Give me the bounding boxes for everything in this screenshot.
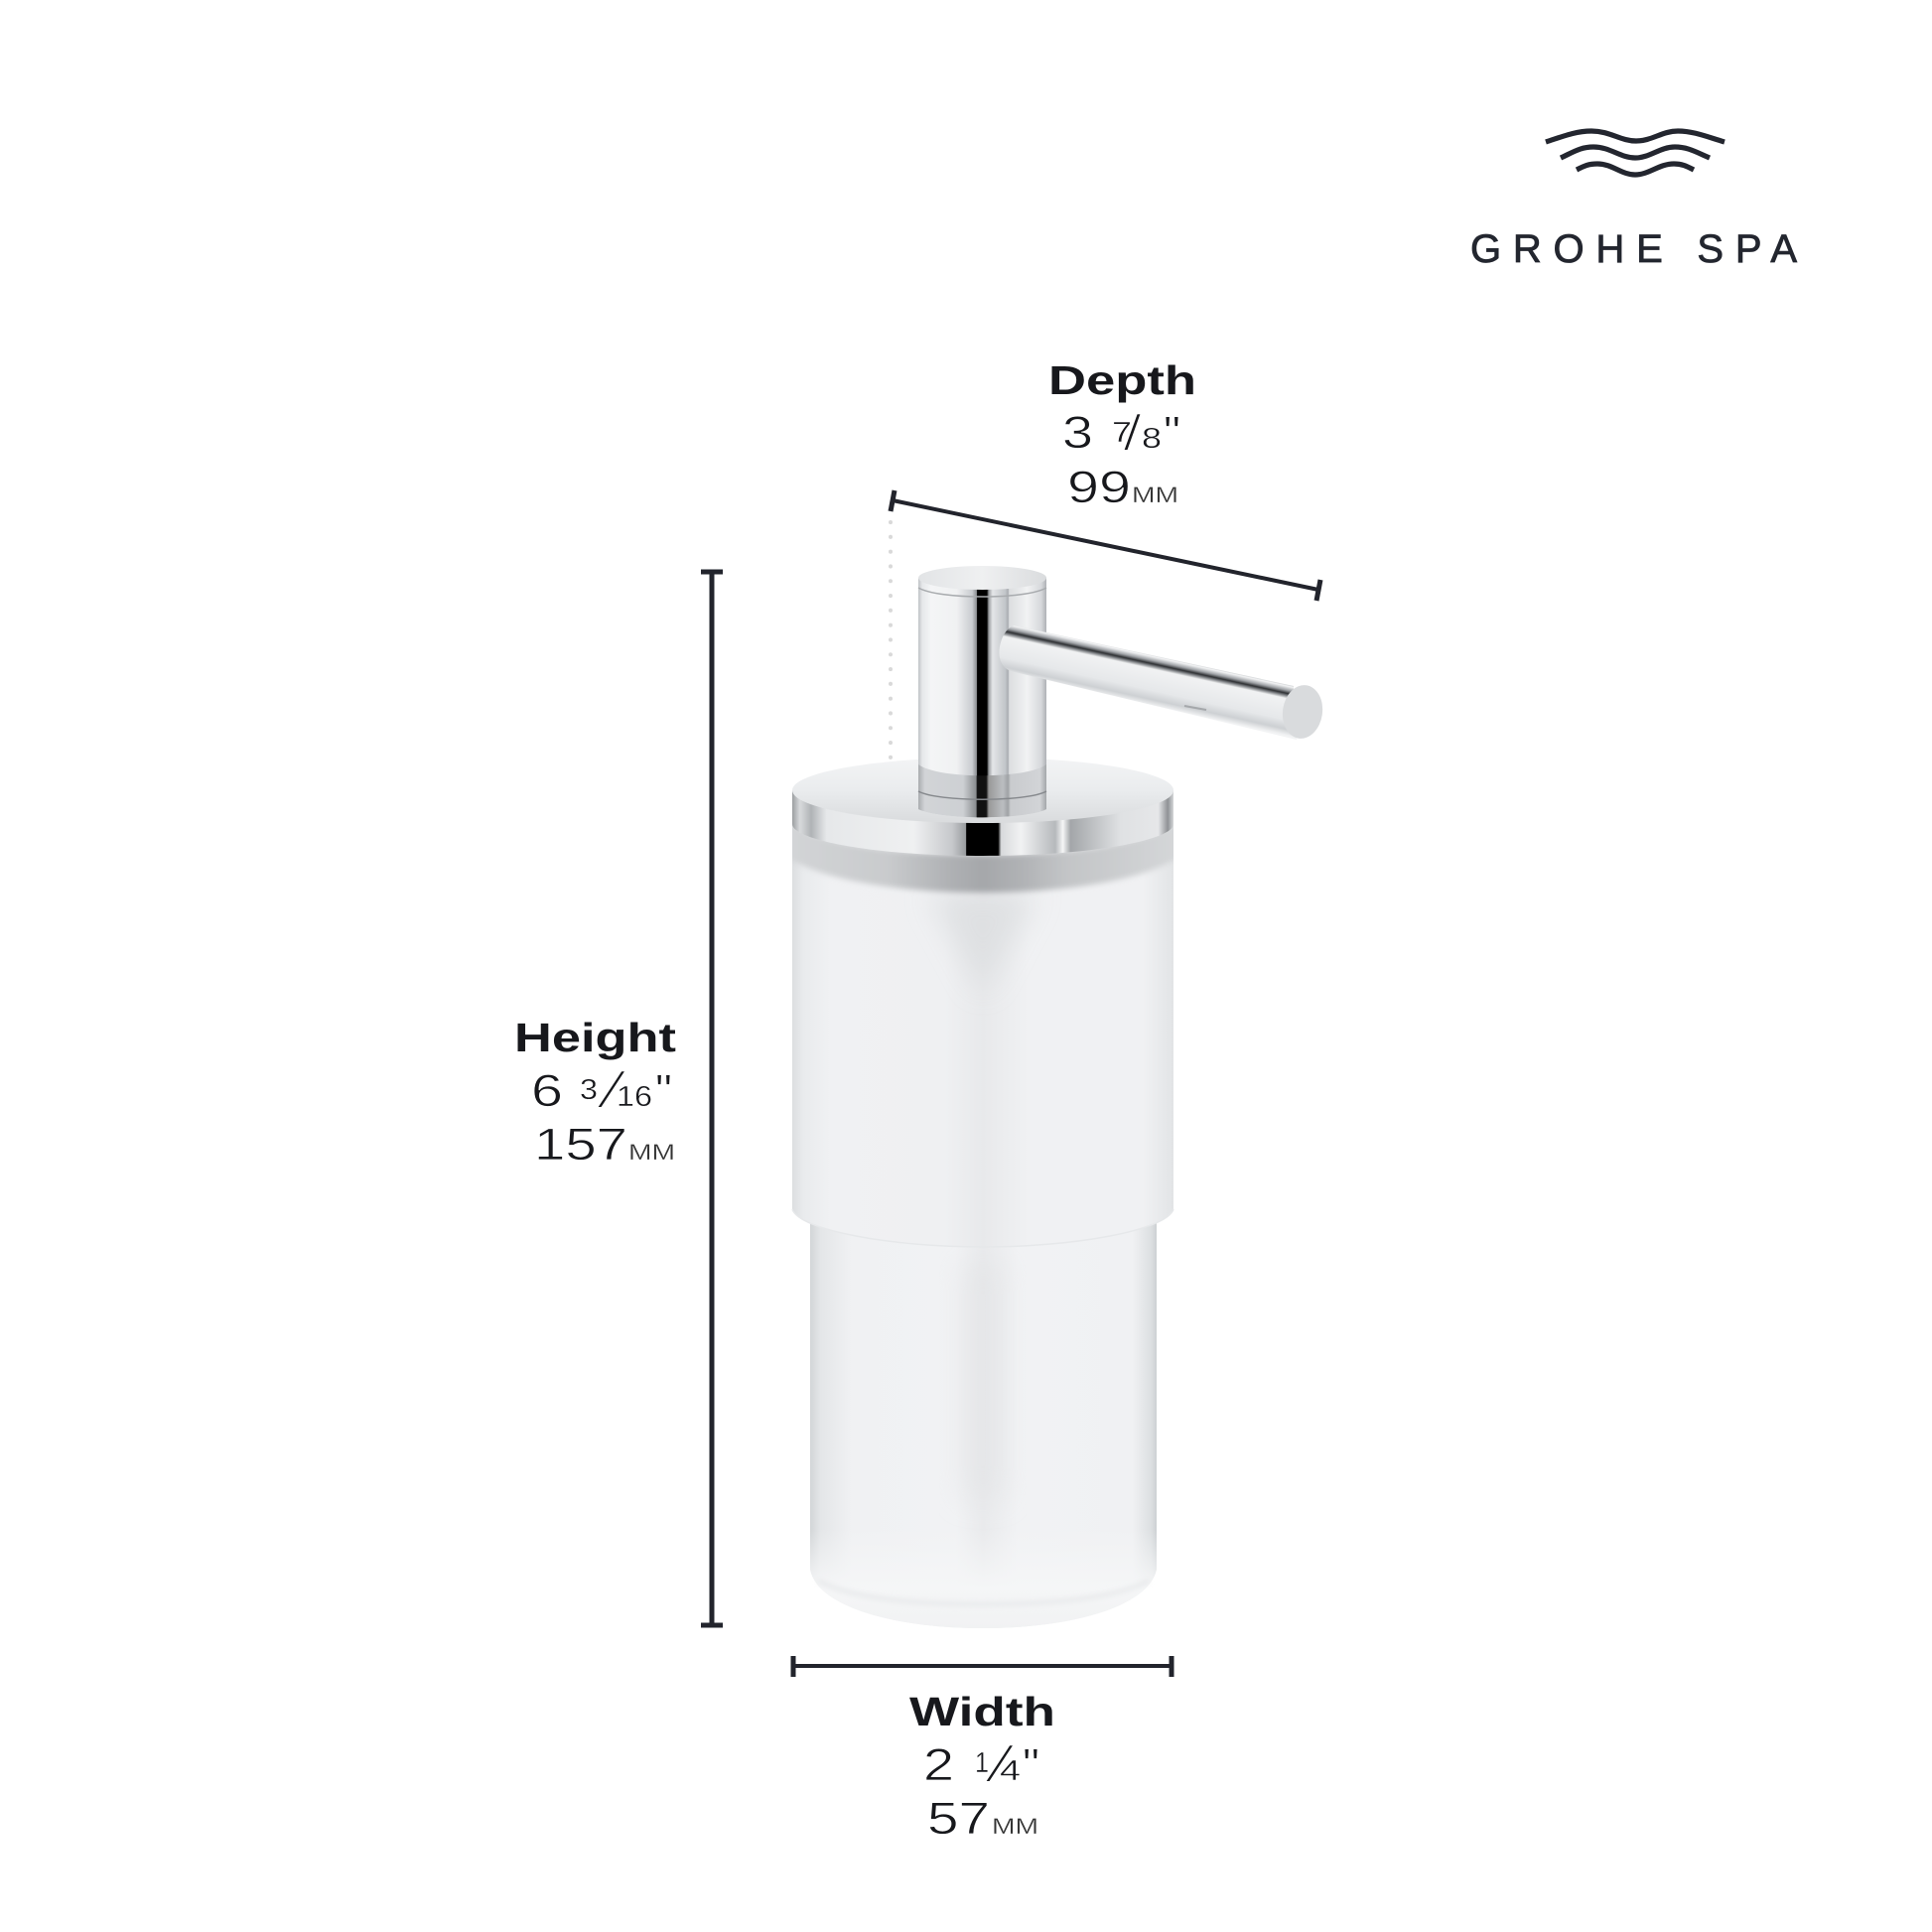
chrome rim (792, 790, 1173, 856)
width inches: 4 (1000, 1755, 1021, 1787)
height inches: " (655, 1065, 672, 1116)
depth inches: 3 (1062, 407, 1093, 458)
width inches: / (982, 1736, 1018, 1792)
width inches: 2 (923, 1739, 954, 1790)
product: soap dispenser (784, 566, 1326, 1628)
height millimetres: MM (628, 1140, 675, 1165)
upper glass sleeve (792, 825, 1173, 1247)
lid top (792, 758, 1173, 823)
depth guide dots (889, 522, 893, 762)
dimension: width (793, 1656, 1172, 1844)
grey band under lid (784, 819, 1181, 893)
depth inches: " (1164, 407, 1180, 458)
pump spout (999, 625, 1326, 742)
height inches: 16 (617, 1081, 652, 1113)
pump stem (918, 566, 1046, 817)
lower glass container (810, 1206, 1157, 1628)
dimension: depth (891, 357, 1320, 762)
depth millimetres: 99 (1067, 462, 1131, 512)
depth inches (1062, 405, 1180, 461)
depth label: Depth (1048, 357, 1196, 403)
height millimetres (534, 1119, 675, 1170)
depth millimetres: MM (1132, 483, 1178, 507)
depth inches: 8 (1142, 423, 1162, 455)
width millimetres (927, 1793, 1038, 1844)
height millimetres: 157 (534, 1119, 627, 1170)
depth arrow (891, 490, 1320, 601)
icon: waves (1546, 131, 1725, 175)
height inches (531, 1062, 672, 1118)
width inches: 1 (975, 1747, 989, 1779)
width inches (923, 1736, 1039, 1792)
depth millimetres (1067, 462, 1178, 512)
dimension: height (514, 572, 723, 1625)
depth inches: / (1123, 405, 1142, 461)
height label: Height (514, 1015, 676, 1060)
logo wordmark: GROHE SPA (1470, 227, 1797, 271)
width millimetres: 57 (927, 1793, 990, 1844)
width inches: " (1023, 1739, 1039, 1790)
height inches: 3 (580, 1074, 598, 1106)
height inches: 6 (531, 1065, 563, 1116)
depth inches: 7 (1112, 417, 1132, 449)
logo: Grohe Spa (1470, 131, 1797, 271)
height inches: / (594, 1062, 629, 1118)
width label: Width (909, 1689, 1055, 1734)
height arrow (701, 572, 723, 1625)
width millimetres: MM (992, 1814, 1038, 1839)
width arrow (793, 1656, 1172, 1677)
